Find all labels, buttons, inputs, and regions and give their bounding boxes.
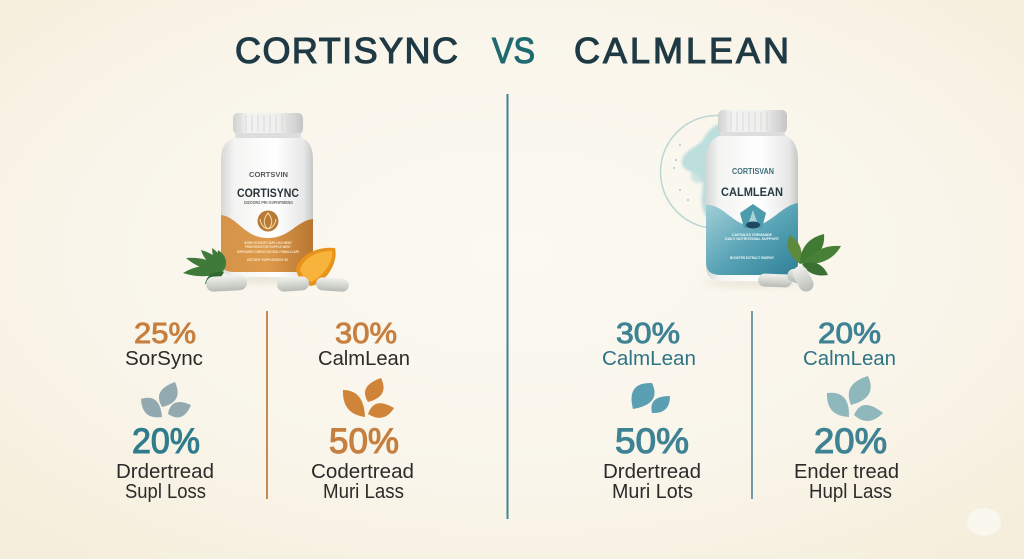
icon: grey leaves — [141, 382, 191, 417]
title: CALMLEAN — [574, 30, 789, 71]
icon: herb leaves — [183, 248, 226, 284]
splash circle — [660, 116, 774, 228]
stat: 20% Drdertread: Drdertread — [116, 461, 214, 483]
stat: 20% CalmLean: CalmLean — [803, 348, 896, 370]
stat: 20% Ender tread: Hupl Lass — [809, 481, 892, 503]
stat: 20% Drdertread — [116, 422, 214, 503]
stat: 20% Ender tread: 20% — [814, 422, 887, 461]
watermark badge — [967, 508, 1001, 536]
bottle label text: CORTISVAN — [732, 167, 774, 176]
bottle body — [706, 136, 798, 281]
bottle label text — [237, 170, 299, 262]
bottle label text: DIZOORZ PRI OSPNITMENG — [244, 200, 293, 205]
stat: 30% CalmLean: 30% — [335, 318, 397, 350]
bottle label text: CORTISYNC — [237, 186, 299, 200]
stat: 30% CalmLean: CalmLean — [602, 348, 696, 370]
stat: 20% Ender tread — [794, 422, 899, 503]
panel: CortiSync stats — [116, 311, 414, 503]
icon: label lotus badge — [258, 210, 278, 232]
bottle body — [221, 138, 313, 277]
stat: 20% Drdertread: 20% — [132, 422, 200, 461]
product: CortiSync bottle — [183, 113, 349, 292]
stat: 50% Codertread: Codertread — [311, 461, 414, 483]
icon: pale teal leaves — [827, 376, 883, 421]
title — [235, 30, 789, 71]
bottle cap — [233, 113, 303, 138]
bottle cap — [718, 110, 787, 137]
title: VS — [492, 30, 535, 71]
stat: 30% CalmLean: CalmLean — [318, 348, 410, 370]
stat: 25% SorSync: 25% — [134, 318, 196, 350]
icon: capsules — [758, 263, 816, 294]
bottle label text: CAPSULES CREMANDE — [732, 233, 773, 237]
panel: CalmLean stats — [602, 311, 899, 503]
icon: orange slice — [296, 248, 336, 286]
bottle label text: PRIM RESISTOR SUPPLE MENT — [245, 245, 292, 249]
title: CORTISYNC — [235, 30, 458, 71]
stat: 20% Ender tread: Ender tread — [794, 461, 899, 483]
icon: teal leaves — [632, 383, 670, 413]
stat: 50% Codertread — [311, 422, 414, 503]
orange divider — [266, 311, 268, 499]
icon: label lotus badge — [740, 204, 766, 228]
icon: capsules — [206, 275, 349, 292]
bottle label text: DAILY NUTRITIONAL SUPPORT — [725, 237, 780, 241]
bottle label text: WORK ROOSITE SUPLOAD MENT — [244, 241, 293, 245]
bottle label text: CALMLEAN — [721, 185, 783, 199]
orange label wave — [221, 215, 313, 272]
stat: 30% CalmLean — [602, 318, 696, 370]
center divider — [506, 94, 508, 519]
stat: 25% SorSync: SorSync — [125, 348, 203, 370]
stat: 20% Drdertread: Supl Loss — [125, 481, 206, 503]
bottle label text: SUPPLEMENT COMPLEX NATURAL FORMULA CAPS — [237, 250, 299, 254]
stat: 30% CalmLean — [318, 318, 410, 370]
stat: 30% CalmLean: 30% — [616, 318, 680, 350]
stat: 20% CalmLean — [803, 318, 896, 370]
blue label wave — [706, 203, 798, 275]
stat: 50% Drdertread — [603, 422, 701, 503]
stat: 50% Codertread: 50% — [329, 422, 399, 461]
icon: orange leaves — [343, 378, 394, 418]
bottle label text — [721, 167, 783, 260]
bottle label text: BOOSTER EXTRACT ENERGY — [730, 256, 775, 260]
stat: 50% Codertread: Muri Lass — [323, 481, 404, 503]
icon: green leaves — [788, 234, 841, 276]
stat: 50% Drdertread: Muri Lots — [612, 481, 693, 503]
teal divider — [751, 311, 753, 499]
stat: 50% Drdertread: Drdertread — [603, 461, 701, 483]
bottle label text: CORTSVIN — [249, 170, 288, 179]
stat: 25% SorSync — [125, 318, 203, 370]
product: CalmLean bottle — [660, 110, 841, 294]
bottle label text: DIETARY SUPPLEMENT 60 — [247, 258, 288, 262]
stat: 20% CalmLean: 20% — [818, 318, 881, 350]
stat: 50% Drdertread: 50% — [615, 422, 689, 461]
